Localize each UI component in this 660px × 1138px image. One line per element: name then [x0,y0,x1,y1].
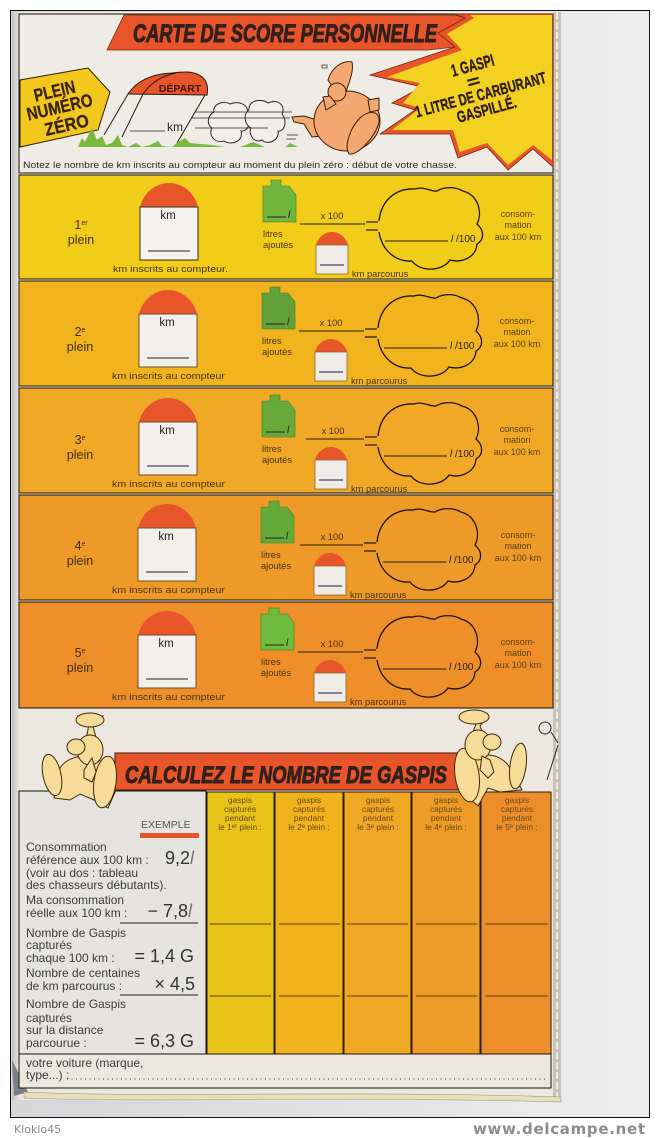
column: 4e plein: capturés [430,804,462,814]
row label: e [82,435,86,442]
row label: plein [68,233,94,247]
column: 1er plein: plein : [237,822,262,832]
milestone: départ: km [167,120,183,134]
panel: 1er plein: mation [504,220,532,230]
milestone [138,504,196,581]
column: 1er plein: er [232,824,237,830]
jerrycan: l [286,638,289,649]
panel: example calculation: = 1,4 G [134,946,194,966]
column: 3e plein: gaspis [366,795,390,805]
column: 4e plein: e [439,824,443,830]
column: 5e plein: le 5 [496,822,538,832]
milestone: km [160,210,176,222]
panel: 1er plein [19,175,553,279]
panel: 1er plein: aux 100 km [495,232,541,242]
milestone [138,611,196,688]
panel: 5e plein: mation [504,648,532,658]
panel: 5e plein: km inscrits au compteur [112,692,225,702]
row label: e [82,541,86,548]
milestone: km [159,317,175,329]
column: 2e plein: capturés [293,804,325,814]
panel: 4e plein: km parcourus [350,590,407,600]
panel: 5e plein: consom- [501,637,535,647]
fraction: x 100 [321,532,343,542]
panel: header [19,14,553,173]
panel: 4e plein: litres [261,550,281,560]
result cloud [378,403,482,484]
row label: 4 [75,539,86,553]
step: hundreds of km: de km parcourus : [26,979,122,993]
panel: 5e plein: aux 100 km [495,660,541,670]
jerrycan [262,395,295,437]
row label: e [82,648,86,655]
row label: plein [67,340,93,354]
column: 2e plein: e [302,824,306,830]
step: total gaspis: capturés [26,1011,72,1025]
starburst: gaspi definition: 1 LITRE DE CARBURANT [413,70,548,121]
sign: plein numéro zéro [20,68,110,147]
character: running [292,62,380,154]
panel: 1er plein: ajoutés [263,240,293,250]
fraction: x 100 [321,211,343,221]
step: gaspis per 100 km: chaque 100 km : [26,951,115,965]
panel: 2e plein: ajoutés [262,347,292,357]
panel: 2e plein [19,281,553,386]
column: 2e plein: le 2 [288,822,330,832]
column: 1er plein: le 1 [218,822,262,832]
sign: plein numéro zéro: ZÉRO [42,109,91,140]
step: reference consumption: référence aux 100 km : [26,853,149,867]
panel: 3e plein: km inscrits au compteur [112,479,225,489]
panel: 1er plein: km parcourus [352,269,409,279]
step: reference consumption: Consommation [26,840,107,854]
column: 5e plein: pendant [502,813,533,823]
step: real consumption: réelle aux 100 km : [26,906,127,920]
stick figure fragment [539,722,558,780]
column: 3e plein: e [371,824,375,830]
panel: 3e plein: ajoutés [262,455,292,465]
jerrycan: l [287,317,290,328]
sign: plein numéro zéro: PLEIN [32,77,77,106]
panel: 1er plein: consom- [501,209,535,219]
example heading: EXEMPLE [141,819,191,831]
panel: 5e plein: ajoutés [261,668,291,678]
milestone: départ [104,72,208,143]
result cloud: l /100 [449,662,474,673]
result cloud [377,616,481,697]
column: 4e plein [412,792,480,1054]
character: left sitting with funnel [39,713,120,809]
result cloud: l /100 [449,555,474,566]
column: 5e plein: gaspis [505,795,529,805]
row label: plein [67,554,93,568]
sign: plein numéro zéro: NUMÉRO [25,89,95,124]
step: total gaspis: parcourue : [26,1036,87,1050]
row label: 3 [75,433,86,447]
row label: e [82,327,86,334]
column: 5e plein: capturés [501,804,533,814]
panel: 3e plein: km parcourus [351,484,408,494]
panel: 3e plein [19,388,553,494]
starburst: gaspi definition: 1 GASPI [449,51,496,81]
step: hundreds of km: Nombre de centaines [26,966,140,980]
column: 1er plein [207,792,274,1054]
fraction [306,426,377,445]
column: 5e plein: plein : [513,822,538,832]
fraction [300,211,378,230]
panel: 2e plein: mation [503,327,531,337]
result cloud [377,509,481,590]
panel: 2e plein: aux 100 km [494,339,540,349]
panel: 4e plein: ajoutés [261,561,291,571]
panel: example calculation: = 6,3 G [134,1031,194,1051]
panel: 4e plein: aux 100 km [495,553,541,563]
column: 3e plein: plein : [374,822,399,832]
column: 5e plein [481,792,551,1054]
instruction text: Notez le nombre de km inscrits au compteur au moment du plein zéro : début de votre chasse. [23,160,457,171]
milestone [139,290,197,367]
column: 4e plein: gaspis [434,795,458,805]
row label: 5 [75,646,86,660]
milestone: km [158,638,174,650]
result cloud [378,295,482,376]
milestone: km [159,425,175,437]
jerrycan [261,608,294,650]
result cloud: l /100 [450,449,475,460]
column: 3e plein: le 3 [357,822,399,832]
panel: 5e plein: litres [261,657,281,667]
panel: example calculation: 9,2l [165,848,195,868]
fraction [300,532,376,551]
jerrycan [261,501,294,543]
column: 5e plein: e [510,824,514,830]
fraction: x 100 [322,426,344,436]
row label: plein [67,448,93,462]
step: reference consumption: des chasseurs débutants). [26,878,167,892]
column: 3e plein: pendant [363,813,394,823]
jerrycan: l [288,210,291,221]
car details row [19,1054,551,1088]
panel: 5e plein [19,602,553,708]
car details row: votre voiture (marque, [26,1056,143,1070]
jerrycan [262,287,295,329]
panel: 1er plein: km inscrits au compteur. [113,264,228,274]
jerrycan: l [287,425,290,436]
column: 1er plein: capturés [224,804,256,814]
result cloud [379,188,483,269]
column: 2e plein [275,792,343,1054]
row label: plein [67,661,93,675]
title banner: calculez [115,753,458,790]
panel: 3e plein: mation [503,435,531,445]
panel: example calculation: × 4,5 [154,974,195,994]
panel: 4e plein: km inscrits au compteur [112,585,225,595]
panel: 2e plein: consom- [500,316,534,326]
column: 1er plein: gaspis [228,795,252,805]
panel: example calculation: − 7,8l [147,901,193,921]
column: 1er plein: pendant [225,813,256,823]
step: gaspis per 100 km: Nombre de Gaspis [26,926,126,940]
row label: 2 [75,325,86,339]
panel: example calculation [19,791,206,1054]
panel: 4e plein [19,495,553,600]
panel: 1er plein: litres [263,229,283,239]
panel: 5e plein: km parcourus [350,697,407,707]
title banner: CARTE DE SCORE PERSONNELLE [133,20,438,48]
starburst: gaspi definition: GASPILLÉ. [455,93,518,127]
step: gaspis per 100 km: capturés [26,938,72,952]
title banner [107,15,465,50]
paper card [12,12,561,1102]
panel: 3e plein: consom- [500,424,534,434]
fraction [298,639,376,658]
milestone [139,398,197,475]
milestone [140,183,198,260]
exhaust clouds [192,100,298,143]
column: 2e plein: pendant [294,813,325,823]
example heading [140,819,199,838]
starburst: gaspi definition: = [465,71,482,93]
milestone: départ: DÉPART [159,82,202,95]
milestone: km [158,531,174,543]
column: 2e plein: gaspis [297,795,321,805]
watermark: site: www.delcampe.net [473,1120,645,1138]
result cloud: l /100 [450,341,475,352]
step: total gaspis: Nombre de Gaspis [26,997,126,1011]
row label: er [81,220,88,227]
fraction [299,318,377,337]
car details row: type...) : [26,1068,69,1082]
column: 4e plein: plein : [442,822,467,832]
column: 3e plein: capturés [362,804,394,814]
column: 3e plein [344,792,411,1054]
column: 4e plein: pendant [431,813,462,823]
watermark: author: Kloklo45 [14,1123,61,1136]
panel: 3e plein: litres [262,444,282,454]
column: 4e plein: le 4 [425,822,467,832]
starburst: gaspi definition [370,14,553,170]
fraction: x 100 [320,318,342,328]
panel: 4e plein: mation [504,541,532,551]
title banner: calculez: CALCULEZ LE NOMBRE DE GASPIS [125,762,447,789]
result cloud: l /100 [451,234,476,245]
step: reference consumption: (voir au dos : tableau [26,866,138,880]
row label: 1 [74,218,88,232]
panel: 4e plein: consom- [501,530,535,540]
jerrycan [263,180,296,222]
panel: 3e plein: aux 100 km [494,447,540,457]
panel: 2e plein: km inscrits au compteur [112,371,225,381]
panel: 2e plein: km parcourus [351,376,408,386]
panel: 2e plein: litres [262,336,282,346]
grass [78,128,298,147]
character: right sitting with funnel [451,710,529,806]
step: total gaspis: sur la distance [26,1023,104,1037]
column: 2e plein: plein : [305,822,330,832]
step: real consumption: Ma consommation [26,893,124,907]
score columns [207,792,551,1054]
jerrycan: l [286,531,289,542]
fraction: x 100 [321,639,343,649]
